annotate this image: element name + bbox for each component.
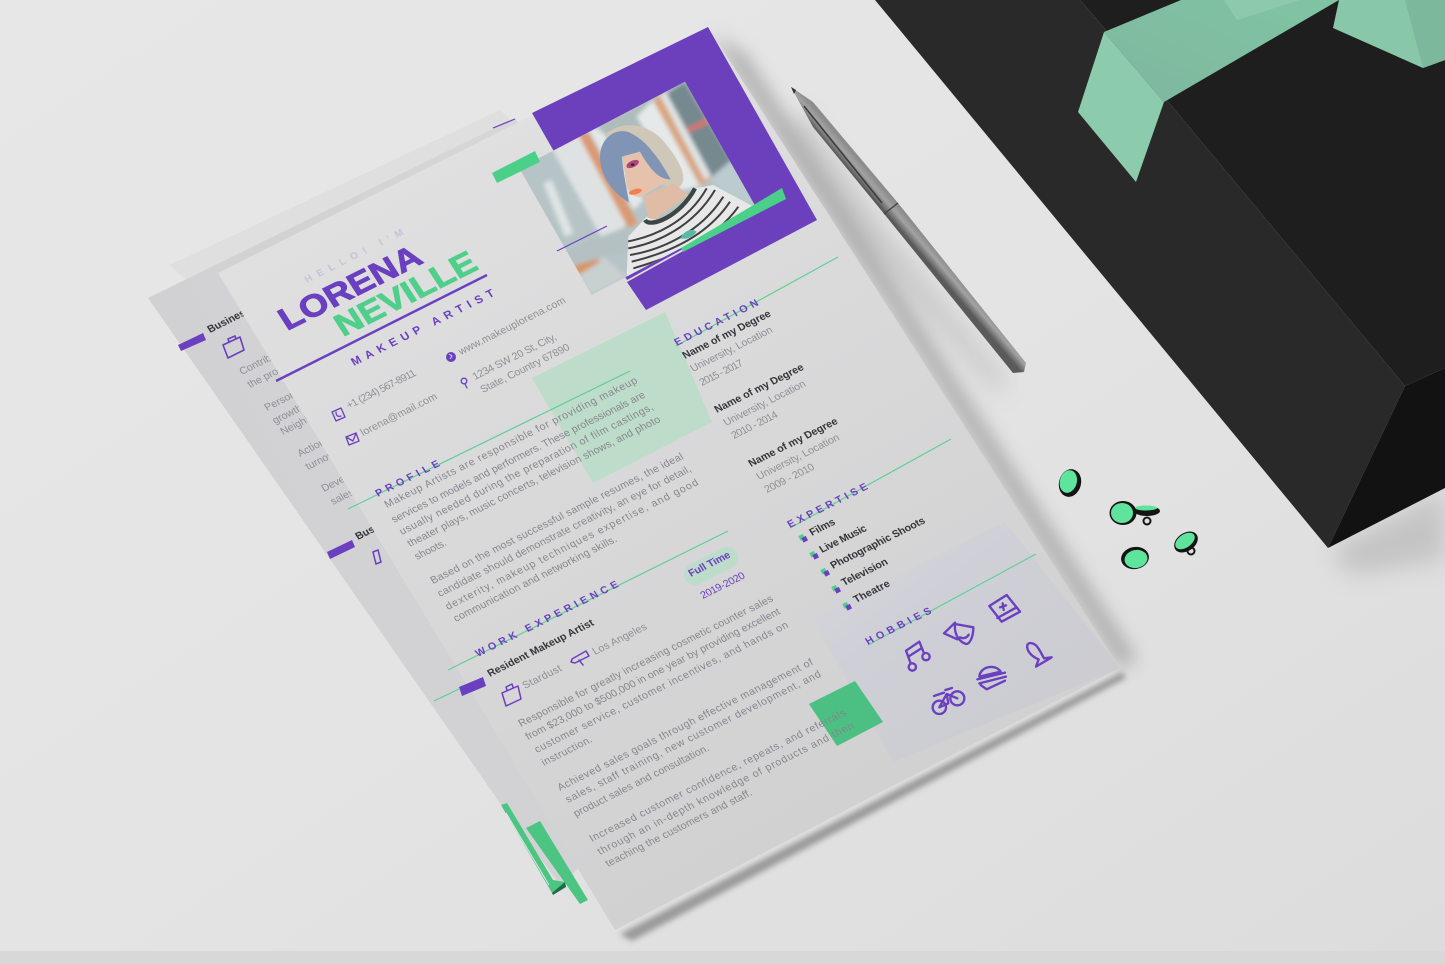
shirt <box>627 185 757 277</box>
back sheet briefcase icon <box>223 336 244 358</box>
expertise list: Films <box>808 517 838 539</box>
face <box>623 151 668 197</box>
contact details: +1 (234) 567-8911 <box>345 368 419 412</box>
icon: envelope <box>346 433 359 445</box>
section: profile <box>374 376 701 625</box>
heading: expertise: EXPERTISE <box>786 482 870 531</box>
location: Los Angeles <box>591 622 649 658</box>
back sheet text fragments: Develop <box>320 468 360 495</box>
greeting: HELLO! I'M <box>303 228 406 286</box>
icon: phone <box>332 408 345 421</box>
education entries: University, Location <box>689 325 775 375</box>
pill: full time: Full Time <box>687 550 733 580</box>
contact details: State, Country 67890 <box>479 342 572 396</box>
name underline <box>276 275 487 381</box>
employer: Stardust <box>521 663 564 692</box>
section: expertise <box>786 482 928 611</box>
profile paragraphs: shoots. <box>413 538 449 563</box>
profile paragraphs: dexterity, makeup techniques expertise, and good <box>444 478 701 613</box>
contact details: lorena@mail.com <box>359 392 440 439</box>
section: hobbies <box>864 595 1052 714</box>
education entries: University, Location <box>722 379 808 429</box>
job title: MAKEUP ARTIST <box>349 288 497 369</box>
green bar bottom <box>681 188 786 252</box>
icon: book <box>989 595 1020 622</box>
work paragraphs: product sales and consultation. <box>572 743 712 820</box>
work paragraphs: customer service, customer incentives, and hands on <box>533 620 791 756</box>
pill: full time <box>680 543 742 589</box>
expertise list <box>798 516 928 611</box>
work paragraphs: sales, staff training, new customer development, and <box>564 669 824 806</box>
mint square <box>532 312 712 483</box>
expertise list: Photographic Shoots <box>829 516 928 572</box>
work paragraphs <box>517 594 857 870</box>
green sheet edges <box>501 803 566 893</box>
work paragraphs: instruction. <box>540 735 595 769</box>
panel: hobbies background <box>812 522 1120 762</box>
job title: Resident Makeup Artist <box>486 618 597 680</box>
expertise list: Live Music <box>818 523 869 556</box>
work paragraphs: from $23,000 to $500,000 in one year by providing excellent <box>524 607 783 743</box>
back sheet text fragments: growth <box>271 403 305 427</box>
page shadow <box>620 34 1136 941</box>
dates: 2019-2020 <box>699 571 748 602</box>
back sheet tab <box>178 333 206 351</box>
section rule lines <box>348 257 1036 670</box>
education entries: Name of my Degree <box>713 362 806 416</box>
work paragraphs: teaching the customers and staff. <box>604 788 754 870</box>
icon: pin <box>461 378 467 388</box>
pen <box>790 87 1026 395</box>
hobby icons <box>906 595 1052 714</box>
icon: signpost <box>571 651 589 665</box>
icon: briefcase <box>502 684 521 706</box>
work paragraphs: Achieved sales goals through effective management of <box>556 657 816 794</box>
purple tab <box>459 677 486 696</box>
expertise list: Theatre <box>852 579 893 606</box>
icon: chess knight <box>1027 643 1052 667</box>
heading: work experience: WORK EXPERIENCE <box>474 580 621 660</box>
green square bottom <box>809 681 883 746</box>
back sheet text fragments: Action <box>296 437 328 460</box>
hair blue <box>600 131 671 203</box>
work paragraphs: through an in-depth knowledge of products and then <box>596 721 857 858</box>
photo of woman <box>521 82 754 295</box>
green bar top <box>492 151 540 183</box>
profile paragraphs: communication and networking skills. <box>452 534 619 625</box>
name: Lorena: LORENA <box>271 238 428 337</box>
icon: theatre masks <box>944 623 973 644</box>
contact details: 1234 SW 20 St, City, <box>471 332 559 383</box>
back sheet text fragments <box>238 341 360 508</box>
icon: globe <box>446 352 456 362</box>
education entries: University, Location <box>755 433 842 483</box>
profile paragraphs: theater plays, music concerts, television shows, and photo <box>406 415 663 550</box>
education entries: Name of my Degree <box>747 416 840 470</box>
name: Neville: NEVILLE <box>327 244 484 343</box>
education entries: 2009 - 2010 <box>763 462 817 496</box>
contact details: www.makeuplorena.com <box>456 295 568 358</box>
profile paragraphs: services to models and performers. These professionals are <box>390 390 648 526</box>
expertise list: Television <box>840 557 890 589</box>
back sheet text fragments: sales <box>329 487 357 508</box>
purple block <box>532 27 817 310</box>
heading: education: EDUCATION <box>673 298 761 349</box>
section: education <box>673 298 842 496</box>
gift box <box>875 0 1445 575</box>
back sheets <box>148 110 850 904</box>
education entries: 2010 - 2014 <box>730 410 780 442</box>
icon: bicycle <box>933 688 964 714</box>
back sheet text fragments: Contribute to <box>238 341 297 378</box>
education entries: Name of my Degree <box>681 309 773 362</box>
purple line on photo <box>557 226 607 251</box>
back sheet text fragments: Neighbor <box>279 409 323 438</box>
icon: music <box>906 642 930 671</box>
ribbon <box>1078 0 1445 182</box>
profile paragraphs: candidate should demonstrate creativity, an eye for detail, <box>436 464 694 600</box>
back sheet text fragments: the product <box>246 358 299 391</box>
back sheet text fragments: turnover <box>304 446 344 473</box>
back sheets: Business <box>354 512 401 543</box>
buttons <box>1056 467 1202 571</box>
back sheet heading: Business Manager <box>206 285 295 336</box>
icon: burger <box>977 667 1006 689</box>
profile paragraphs: Based on the most successful sample resumes, the ideal <box>429 452 686 587</box>
neck <box>644 184 688 220</box>
hair blond <box>605 125 683 187</box>
heading: hobbies: HOBBIES <box>864 606 934 648</box>
back sheet text fragments: Personal <box>263 386 306 414</box>
main resume page <box>218 27 1120 930</box>
profile paragraphs: usually needed during the preparation of film castings, <box>398 402 656 538</box>
second back tab <box>327 540 355 559</box>
section: work experience <box>459 543 857 870</box>
education entries: 2015 - 2017 <box>698 358 746 389</box>
education entries <box>681 309 842 496</box>
work paragraphs: Responsible for greatly increasing cosmetic counter sales <box>517 594 776 730</box>
heading: profile: PROFILE <box>374 459 442 500</box>
work paragraphs: Increased customer confidence, repeats, and referrals <box>588 708 848 845</box>
profile paragraphs: Makeup Artists are responsible for providing makeup <box>383 376 640 511</box>
contact details <box>332 295 572 445</box>
profile paragraphs <box>383 376 701 625</box>
